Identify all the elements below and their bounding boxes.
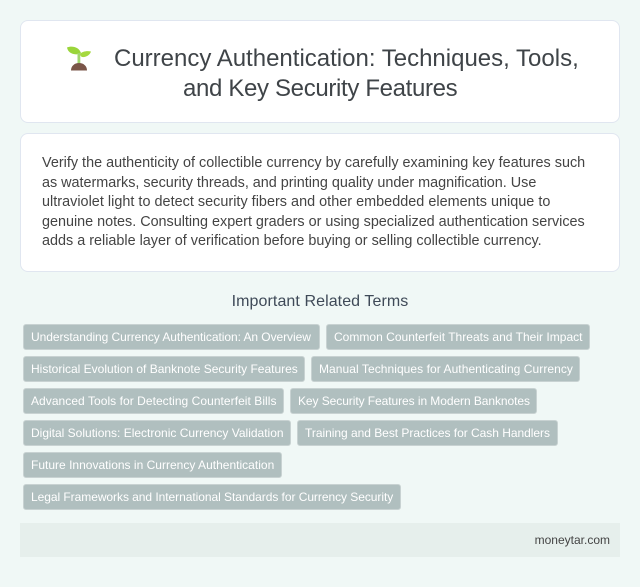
tag [23, 484, 401, 510]
text block: as watermarks, security threads, and printing quality under magnification. Use [42, 174, 536, 190]
tag: Manual Techniques for Authenticating Currency [319, 362, 573, 376]
tag: Understanding Currency Authentication: An Overview [31, 330, 311, 344]
tag [23, 324, 320, 350]
tag [290, 388, 537, 414]
text block: adds a reliable layer of verification before buying or selling collectible currency. [42, 233, 542, 249]
tag [297, 420, 558, 446]
tag: Legal Frameworks and International Standards for Currency Security [31, 490, 393, 504]
panel: title card [20, 20, 620, 123]
tag: Key Security Features in Modern Banknotes [298, 394, 530, 408]
text block [42, 155, 585, 249]
footer [20, 523, 620, 557]
tag [326, 324, 590, 350]
tag [23, 388, 284, 414]
tag list [23, 324, 590, 510]
tag: Training and Best Practices for Cash Handlers [305, 426, 550, 440]
heading: Currency Authentication: Techniques, Tools, [114, 45, 579, 72]
heading [114, 45, 579, 102]
tag: Digital Solutions: Electronic Currency Validation [31, 426, 284, 440]
footer text: moneytar.com [535, 533, 610, 547]
tag [311, 356, 580, 382]
heading: and Key Security Features [183, 75, 457, 102]
tag: Common Counterfeit Threats and Their Impact [334, 330, 583, 344]
tag [23, 356, 305, 382]
tag [23, 420, 291, 446]
heading: related terms: Important Related Terms [232, 293, 408, 310]
tag [23, 452, 282, 478]
tag: Future Innovations in Currency Authentication [31, 458, 274, 472]
icon: seedling [67, 46, 91, 70]
panel: description [20, 133, 620, 272]
text block: genuine notes. Consulting expert graders or using specialized authentication services [42, 214, 585, 230]
tag: Advanced Tools for Detecting Counterfeit Bills [31, 394, 277, 408]
text block: ultraviolet light to detect security fibers and other embedded elements unique to [42, 194, 550, 210]
text block: Verify the authenticity of collectible currency by carefully examining key features such [42, 155, 585, 171]
tag: Historical Evolution of Banknote Security Features [31, 362, 298, 376]
